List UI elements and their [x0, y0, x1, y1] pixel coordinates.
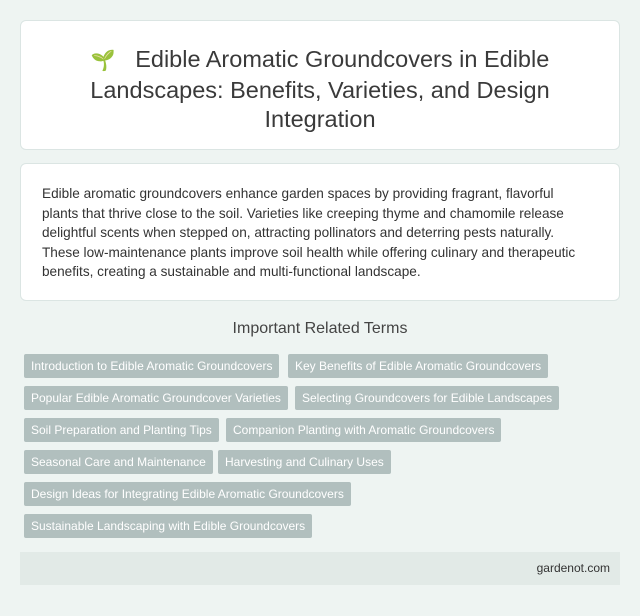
related terms tags: Key Benefits of Edible Aromatic Groundcovers	[295, 359, 541, 373]
related terms heading: Important Related Terms	[233, 320, 407, 337]
header card	[20, 20, 620, 150]
related terms tags: Popular Edible Aromatic Groundcover Varieties	[31, 391, 281, 405]
related terms tags: Sustainable Landscaping with Edible Groundcovers	[31, 519, 305, 533]
related terms tags: Selecting Groundcovers for Edible Landscapes	[302, 391, 552, 405]
title: 🌱 Edible Aromatic Groundcovers in Edible Landscapes: Benefits, Varieties, and Design Integration	[90, 46, 550, 132]
related terms tags: Companion Planting with Aromatic Groundcovers	[233, 423, 494, 437]
related terms tags: Harvesting and Culinary Uses	[225, 455, 384, 469]
description card	[20, 163, 620, 301]
related terms tags: Soil Preparation and Planting Tips	[31, 423, 212, 437]
description text: Edible aromatic groundcovers enhance garden spaces by providing fragrant, flavorful plants that thrive close to the soil. Varieties like creeping thyme and chamomile release delightful scents when stepped on, attracting pollinators and deterring pests naturally. These low-maintenance plants improve soil health while offering culinary and therapeutic benefits, creating a sustainable and multi-functional landscape.	[42, 186, 575, 279]
footer	[20, 552, 620, 585]
related terms tags: Design Ideas for Integrating Edible Aromatic Groundcovers	[31, 487, 344, 501]
footer source: gardenot.com	[537, 561, 610, 575]
related terms tags: Introduction to Edible Aromatic Groundcovers	[31, 359, 272, 373]
related terms tags: Seasonal Care and Maintenance	[31, 455, 206, 469]
